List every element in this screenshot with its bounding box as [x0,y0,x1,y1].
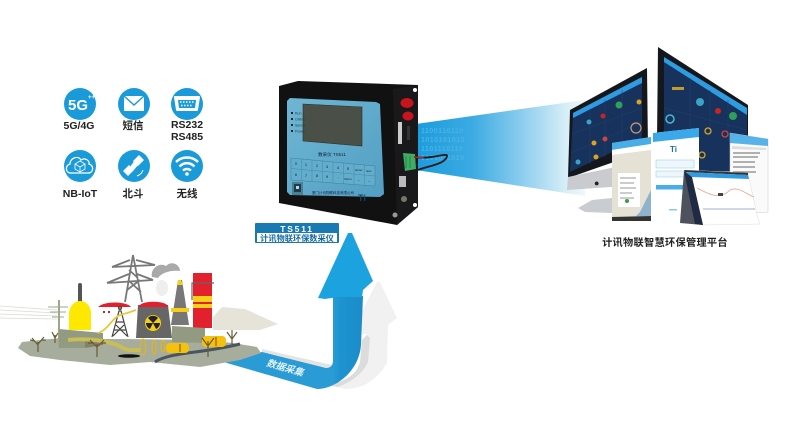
keypad: · [337,175,339,180]
striped tower [171,280,189,325]
icon: serial port [171,88,203,120]
label: RS232 RS485: RS485 [171,131,203,143]
keypad: 9 [326,174,329,179]
icon: 5G/4G: 5G [68,97,88,114]
wind lines [0,306,57,319]
green terminal block [403,153,416,171]
blue data arrow [220,233,373,389]
keypad: Menu [344,177,352,181]
keypad: 2 [316,163,319,168]
smoke [152,263,180,296]
yellow rings [140,339,165,355]
keypad: Enter [355,168,363,172]
cooling tower [136,302,172,338]
oil puddle [118,354,140,358]
keypad: 5 [347,166,350,171]
arrow white edge [262,349,332,369]
icon grid: communication methods [63,88,203,200]
icon: 5G/4G [64,88,99,120]
status LEDs: Online [295,118,305,122]
label: NB-IoT: NB-IoT [63,188,98,200]
keypad: ← [357,177,361,182]
label: wireless: 无线 [176,187,198,200]
icon: NB-IoT cloud [64,150,96,182]
device: TS511 data logger [279,81,447,225]
status LEDs [291,112,307,134]
band text: 数据采集 [265,357,306,379]
keypad: 1 [305,162,308,167]
stand [578,198,612,213]
island ground [18,338,261,367]
keypad: 0 [295,161,298,166]
left monitor: ● [594,178,599,188]
left wall [59,329,103,348]
label: SMS: 短信 [122,119,144,132]
keypad: 8 [316,173,319,178]
front panel [287,98,384,197]
model text: 数采仪 TS511 [318,151,346,158]
icon: SMS envelope [118,88,150,120]
data beam from device to platform [416,100,585,196]
data beam from device to platform: 1100110110 [421,128,464,135]
mobile screen: map [612,137,651,221]
mobile screen: settings list [730,133,768,215]
left monitor [567,68,648,213]
mobile screen: login: Ti [670,145,677,154]
cable loop [414,155,447,170]
keypad: 4 [337,165,340,170]
yellow pipeline [68,310,140,350]
QR code [292,182,303,195]
company name: 厦门计讯物联科技有限公司 [312,190,354,195]
road [155,344,240,362]
white building [98,302,131,339]
pylon [107,255,155,302]
red stack [192,273,214,328]
red antenna connectors [400,98,414,120]
icon: 5G/4G: +++ [88,95,99,101]
device side [393,85,418,225]
device body [279,81,418,225]
keypad: 7 [305,173,308,178]
oil derrick [112,306,128,337]
icon: wireless [171,150,203,182]
mountain backdrop [213,307,278,330]
yellow tank [69,283,91,330]
label: Beidou: 北斗 [122,188,144,200]
data beam from device to platform: 1010101010 [421,137,465,144]
mobile screen: login [653,128,699,223]
product label: TS511: TS511 [280,224,314,234]
mounting ears [392,88,417,218]
icon: Beidou satellite [118,150,150,182]
right monitor [657,47,748,172]
platform: monitors and mobile screens [567,47,768,225]
data beam from device to platform: 0101011010 [421,155,465,162]
label: RS232 RS485: RS232 [171,119,203,131]
product label: TS511 [255,223,339,243]
keypad: 6 [295,172,298,177]
status LEDs: Sensor [295,124,307,128]
keypad: → [367,178,371,183]
white arrow (back) [328,282,397,389]
brand logo: Ti [358,193,366,203]
arrow head [318,233,373,299]
keypad [291,158,375,186]
keypad: Esc [366,169,372,173]
LCD screen [303,104,362,146]
product label: TS511: 计讯物联环保数采仪 [260,233,335,243]
tanker trucks [166,336,226,353]
bare trees [30,330,237,357]
utility pole [48,300,68,348]
label: 5G/4G: 5G/4G [64,120,94,132]
data beam from device to platform: 1101110110 [421,146,463,153]
keypad: 3 [326,164,329,169]
arrow body [220,296,363,389]
right wall [172,326,205,343]
status LEDs: Run [295,112,301,116]
side ports [398,122,410,202]
status LEDs: Power [295,130,306,134]
industrial island scene [0,255,261,367]
platform title: 计讯物联智慧环保管理平台 [602,236,728,249]
chart window [680,170,760,225]
